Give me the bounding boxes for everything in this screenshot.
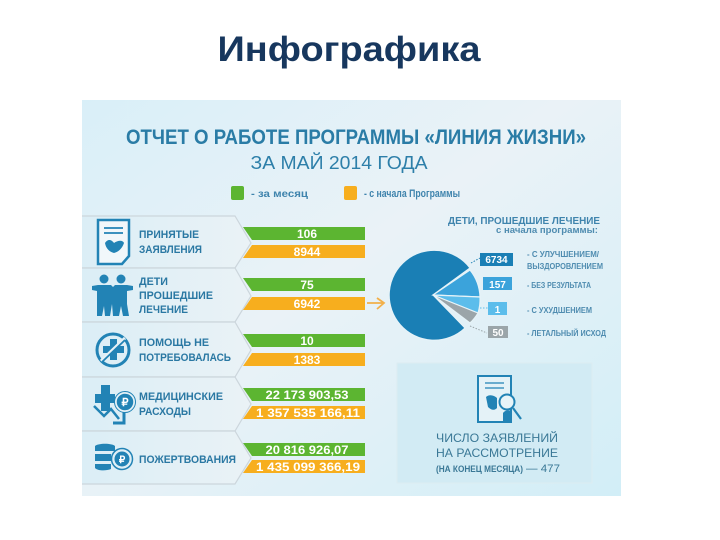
legend bbox=[231, 186, 460, 200]
icon: children bbox=[92, 274, 133, 316]
text: applications count: ЧИСЛО ЗАЯВЛЕНИЙ bbox=[436, 430, 558, 445]
bar: no help month: 10 bbox=[300, 334, 314, 348]
icon: application document bbox=[98, 220, 129, 264]
bar: treated month: 75 bbox=[300, 278, 314, 292]
pie callout: 50 bbox=[470, 326, 606, 339]
icon: document with magnifier bbox=[478, 376, 521, 422]
pie callout: 50: - ЛЕТАЛЬНЫЙ ИСХОД bbox=[527, 329, 606, 338]
row panel: applications bbox=[82, 216, 251, 268]
label: ПРОШЕДШИЕ bbox=[139, 290, 213, 302]
bar: no help total bbox=[243, 353, 365, 367]
bar: no help month bbox=[243, 334, 365, 348]
icon: coins bbox=[95, 444, 132, 470]
bar: treated total bbox=[243, 297, 365, 311]
pie callout: 157: - БЕЗ РЕЗУЛЬТАТА bbox=[527, 281, 591, 290]
pie chart bbox=[389, 250, 480, 340]
slide title: Инфографика bbox=[218, 30, 481, 69]
pie callout: 6734: 6734 bbox=[485, 255, 508, 266]
label: ДЕТИ bbox=[139, 276, 168, 288]
bar: expenses month bbox=[243, 388, 365, 402]
row panel: help not needed bbox=[82, 322, 251, 377]
bar: applications month bbox=[243, 227, 365, 241]
heading: pie chart title: ДЕТИ, ПРОШЕДШИЕ ЛЕЧЕНИЕ bbox=[448, 215, 600, 227]
bar: treated total: 6942 bbox=[294, 297, 321, 311]
bar: donations month bbox=[243, 443, 365, 457]
pie callout: 157: 157 bbox=[489, 280, 506, 291]
bar: applications total: 8944 bbox=[294, 245, 321, 259]
bar: no help total: 1383 bbox=[294, 353, 321, 367]
arrow to pie chart bbox=[367, 298, 384, 309]
heading: report title: ОТЧЕТ О РАБОТЕ ПРОГРАММЫ «ЛИНИЯ ЖИЗНИ» bbox=[126, 126, 586, 149]
bar: applications month: 106 bbox=[297, 227, 317, 241]
label: ПРИНЯТЫЕ bbox=[139, 229, 199, 241]
value: 477: — 477 bbox=[526, 463, 560, 475]
heading: pie chart title: с начала программы: bbox=[496, 225, 598, 235]
label: РАСХОДЫ bbox=[139, 406, 191, 418]
pie callout: 1: - С УХУДШЕНИЕМ bbox=[527, 306, 592, 315]
pie callout: 6734: - С УЛУЧШЕНИЕМ/ bbox=[527, 250, 600, 259]
row panel: treated children bbox=[82, 268, 251, 322]
pie callout: 50: 50 bbox=[492, 328, 504, 339]
heading: pie chart title bbox=[448, 215, 600, 235]
bar: expenses month: 22 173 903,53 bbox=[266, 388, 349, 402]
heading: report title bbox=[126, 126, 586, 173]
panel: applications under review bbox=[397, 363, 592, 483]
label: ПОТРЕБОВАЛАСЬ bbox=[139, 352, 231, 364]
bar: expenses total: 1 357 535 166,11 bbox=[256, 406, 360, 420]
heading: report title: ЗА МАЙ 2014 ГОДА bbox=[250, 152, 428, 173]
bar: applications total bbox=[243, 245, 365, 259]
label: МЕДИЦИНСКИЕ bbox=[139, 391, 223, 403]
legend: - с начала Программы bbox=[364, 188, 460, 200]
bar: donations month: 20 816 926,07 bbox=[266, 443, 349, 457]
label: ПОЖЕРТВОВАНИЯ bbox=[139, 454, 236, 466]
row panel: medical expenses bbox=[82, 377, 251, 431]
pie callout: 157 bbox=[483, 277, 591, 291]
row panel: donations bbox=[82, 431, 251, 484]
label: ЛЕЧЕНИЕ bbox=[139, 304, 188, 316]
pie callout: 6734: ВЫЗДОРОВЛЕНИЕМ bbox=[527, 262, 603, 271]
text: applications count: НА РАССМОТРЕНИЕ bbox=[436, 446, 558, 460]
pie callout: 1 bbox=[480, 302, 592, 316]
text: end of month total: (НА КОНЕЦ МЕСЯЦА) bbox=[436, 464, 523, 474]
icon: coins: ₽ bbox=[119, 455, 126, 466]
pie callout: 6734 bbox=[471, 250, 603, 271]
icon: crossed-out medical cross bbox=[97, 334, 129, 366]
panel: infographic bbox=[82, 100, 621, 496]
icon: medical expenses: ₽ bbox=[122, 397, 128, 409]
label: ЗАЯВЛЕНИЯ bbox=[139, 244, 202, 256]
pie callout: 1: 1 bbox=[495, 305, 501, 316]
bar: donations total: 1 435 099 366,19 bbox=[256, 460, 360, 474]
legend: - за месяц bbox=[251, 189, 309, 200]
bar: treated month bbox=[243, 278, 365, 292]
label: ПОМОЩЬ НЕ bbox=[139, 337, 209, 349]
panel background bbox=[82, 100, 621, 496]
icon: medical expenses bbox=[94, 385, 136, 423]
